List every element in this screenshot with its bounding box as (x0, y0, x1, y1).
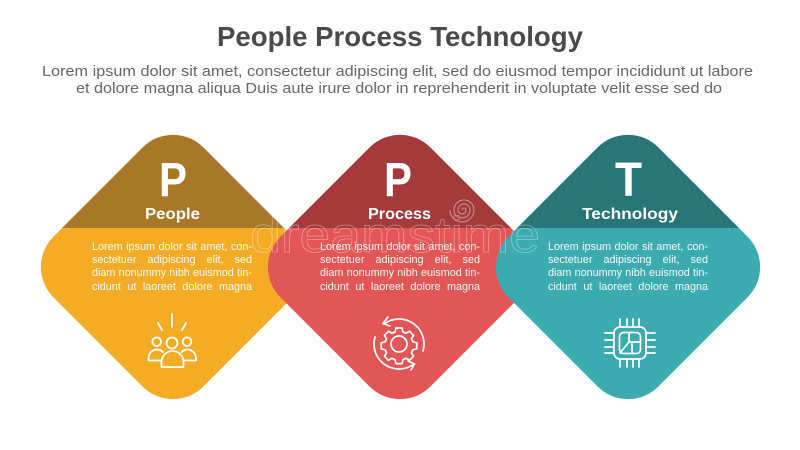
technology body text: cidunt ut laoreet dolore magna (548, 281, 708, 293)
process body text: Lorem ipsum dolor sit amet, con- (320, 240, 480, 252)
subtitle text block (42, 64, 753, 97)
process diamond shape (268, 134, 514, 400)
people body text: diam nonummy nibh euismod tin- (92, 267, 252, 279)
icon: people group (148, 313, 197, 368)
process body text: diam nonummy nibh euismod tin- (320, 267, 480, 279)
subtitle text block: Lorem ipsum dolor sit amet, consectetur adipiscing elit, sed do eiusmod tempor incididunt ut labore (42, 64, 753, 80)
icon: microchip (604, 318, 656, 368)
process body text: sectetuer adipiscing elit, sed (320, 254, 480, 266)
process body text (320, 240, 480, 293)
panel: process (268, 134, 514, 400)
people body text: Lorem ipsum dolor sit amet, con- (92, 240, 252, 252)
technology diamond shape (496, 134, 760, 400)
technology body text: sectetuer adipiscing elit, sed (548, 254, 708, 266)
people letter and name (145, 154, 200, 223)
technology body text: Lorem ipsum dolor sit amet, con- (548, 240, 708, 252)
people body text: cidunt ut laoreet dolore magna (92, 281, 252, 293)
icon: gear with cycle arrows (373, 316, 425, 371)
technology letter and name: T (615, 154, 642, 207)
panel: people (40, 134, 286, 400)
people body text (92, 240, 252, 293)
subtitle text block: et dolore magna aliqua Duis aute irure dolor in reprehenderit in voluptate velit esse sed do (76, 81, 722, 97)
people diamond shape (40, 134, 286, 400)
process letter and name: Process (368, 206, 431, 223)
technology letter and name: Technology (582, 206, 678, 223)
people letter and name: P (159, 154, 187, 207)
people body text: sectetuer adipiscing elit, sed (92, 254, 252, 266)
people letter and name: People (145, 206, 200, 223)
process body text: cidunt ut laoreet dolore magna (320, 281, 480, 293)
technology body text: diam nonummy nibh euismod tin- (548, 267, 708, 279)
title: People Process Technology (217, 21, 583, 52)
technology body text (548, 240, 708, 293)
panel: technology (496, 134, 760, 400)
process letter and name: P (384, 154, 412, 207)
process letter and name (368, 154, 431, 223)
technology letter and name (582, 154, 678, 223)
